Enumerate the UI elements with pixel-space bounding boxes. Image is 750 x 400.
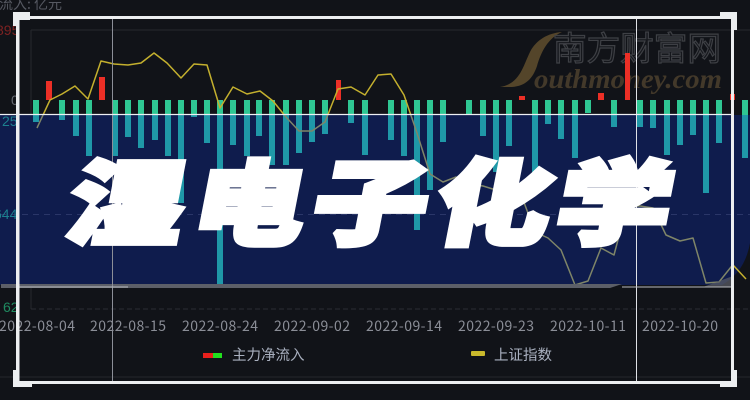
legend: main net inflow: 主力净流入 xyxy=(232,344,304,365)
x-axis date labels: 2022-09-14 xyxy=(366,316,442,336)
x-axis date labels: 2022-08-04 xyxy=(0,316,75,336)
x-axis date labels: 2022-08-15 xyxy=(90,316,166,336)
title: 湿 xyxy=(59,131,199,264)
x-axis date labels: 2022-10-11 xyxy=(550,316,626,336)
axis labels: y values: 25 xyxy=(2,113,18,129)
axis labels: y values: 0 xyxy=(11,92,19,108)
watermark: southmoney logo: 南方财富网 xyxy=(553,22,721,70)
axis labels: y values: 62 xyxy=(3,299,19,315)
bar chart: main net inflow xyxy=(33,53,748,285)
line chart: Shanghai index xyxy=(37,53,746,285)
title: 电 xyxy=(184,131,320,264)
grey baseline xyxy=(1,284,622,288)
title: 化 xyxy=(426,131,566,264)
x-axis date labels: 2022-09-02 xyxy=(274,316,350,336)
x-axis date labels: 2022-08-24 xyxy=(182,316,258,336)
panel: blue highlight band xyxy=(0,115,750,285)
legend: Shanghai index: 上证指数 xyxy=(494,344,552,365)
title xyxy=(59,131,687,264)
x-axis date labels xyxy=(0,316,718,336)
watermark: southmoney logo xyxy=(500,22,722,94)
x-axis date labels: 2022-10-20 xyxy=(642,316,718,336)
title: 子 xyxy=(303,131,443,264)
x-axis date labels: 2022-09-23 xyxy=(458,316,534,336)
axis labels: y values xyxy=(0,22,20,315)
watermark: southmoney logo: outhmoney.com xyxy=(534,64,722,94)
title: 学 xyxy=(547,131,687,264)
